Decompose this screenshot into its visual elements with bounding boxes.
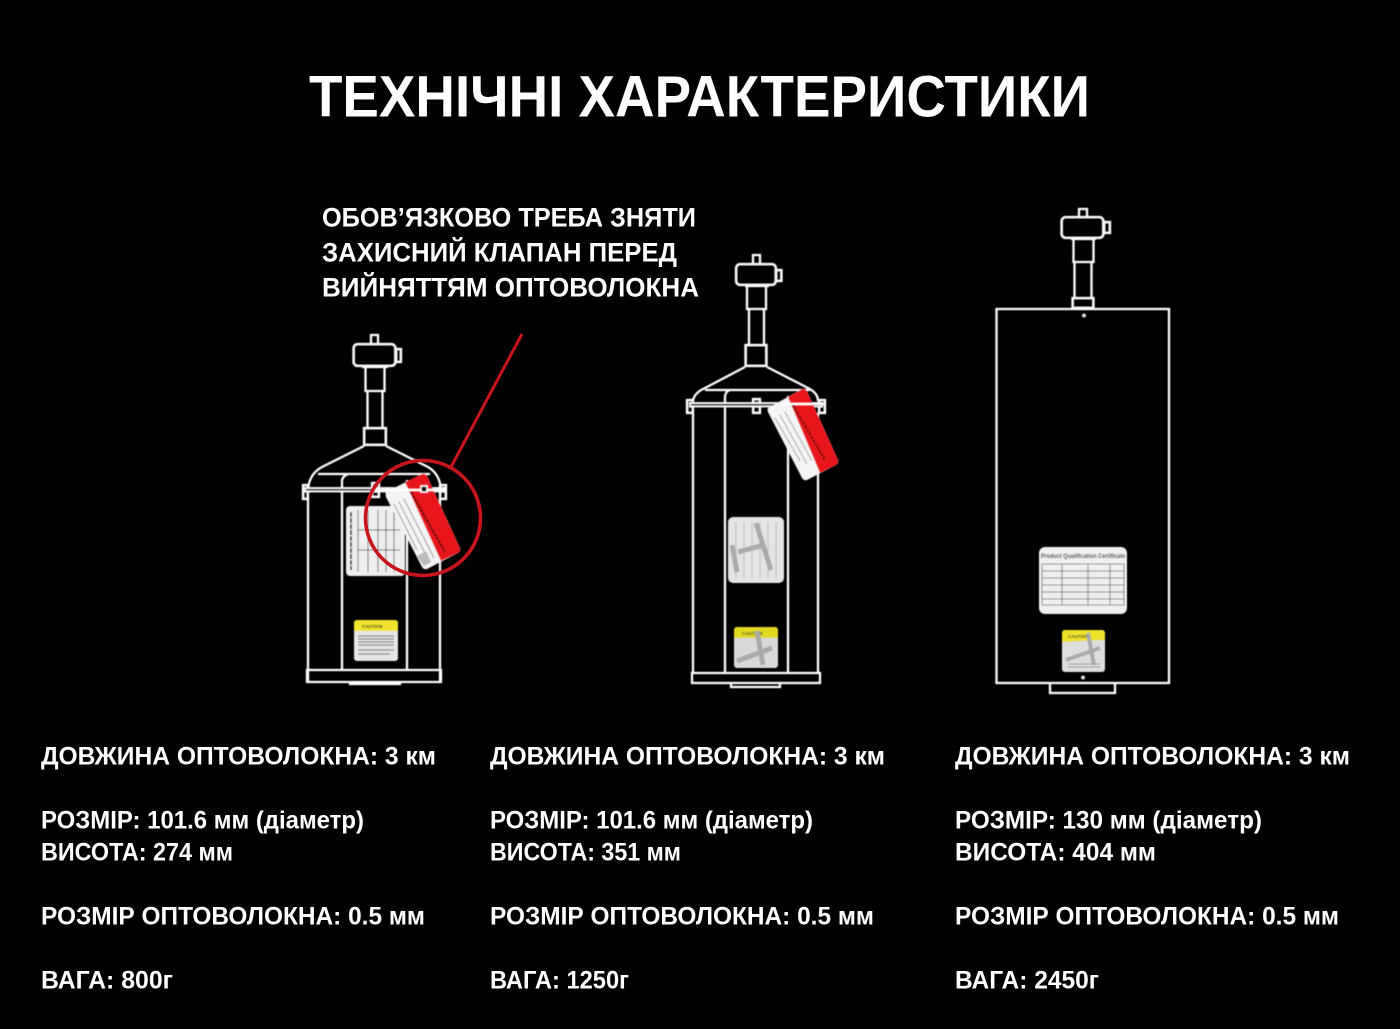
specs column 2: ВИСОТА: 351 мм xyxy=(490,838,681,866)
certificate label xyxy=(1039,547,1127,614)
certificate label: Product Qualification Certificate xyxy=(1041,553,1125,560)
specs column 2: ДОВЖИНА ОПТОВОЛОКНА: 3 км xyxy=(490,742,885,770)
caution label xyxy=(1062,630,1105,672)
specs column 2: РОЗМІР ОПТОВОЛОКНА: 0.5 мм xyxy=(490,902,874,930)
specs column 1: РОЗМІР ОПТОВОЛОКНА: 0.5 мм xyxy=(41,902,425,930)
certificate label xyxy=(346,506,405,576)
specs column 3: РОЗМІР: 130 мм (діаметр) xyxy=(955,806,1262,834)
caution label xyxy=(734,627,778,668)
specs column 1: ДОВЖИНА ОПТОВОЛОКНА: 3 км xyxy=(41,742,436,770)
cylinder: medium canister xyxy=(687,255,838,687)
specs column 3: ДОВЖИНА ОПТОВОЛОКНА: 3 км xyxy=(955,742,1350,770)
callout: valve warning: ВИЙНЯТТЯМ ОПТОВОЛОКНА xyxy=(322,272,699,302)
specs column 2: ВАГА: 1250г xyxy=(490,966,629,994)
specs column 3 xyxy=(955,742,1350,994)
specs column 1: ВИСОТА: 274 мм xyxy=(41,838,233,866)
warning tag xyxy=(386,474,460,569)
warning tag xyxy=(768,389,838,480)
cylinder: small canister xyxy=(303,335,460,684)
certificate label xyxy=(728,517,784,583)
callout: valve warning: ЗАХИСНИЙ КЛАПАН ПЕРЕД xyxy=(322,236,677,268)
specs column 1: РОЗМІР: 101.6 мм (діаметр) xyxy=(41,806,364,834)
callout: valve warning: ОБОВ’ЯЗКОВО ТРЕБА ЗНЯТИ xyxy=(322,202,696,232)
caution label: CAUTION xyxy=(362,624,382,629)
specs column 3: ВАГА: 2450г xyxy=(955,966,1099,994)
caution label: CAUTION xyxy=(742,631,762,636)
specs column 1: ВАГА: 800г xyxy=(41,966,173,994)
specs column 3: РОЗМІР ОПТОВОЛОКНА: 0.5 мм xyxy=(955,902,1339,930)
caution label: CAUTION xyxy=(1068,634,1088,639)
specs column 2: РОЗМІР: 101.6 мм (діаметр) xyxy=(490,806,813,834)
title: ТЕХНІЧНІ ХАРАКТЕРИСТИКИ xyxy=(309,64,1090,130)
caution label xyxy=(354,620,398,661)
specs column 3: ВИСОТА: 404 мм xyxy=(955,838,1156,866)
callout: valve warning xyxy=(322,202,699,302)
case: large canister xyxy=(996,209,1169,693)
specs column 2 xyxy=(490,742,885,994)
specs column 1 xyxy=(41,742,436,994)
red highlight circle and pointer line xyxy=(366,334,522,576)
